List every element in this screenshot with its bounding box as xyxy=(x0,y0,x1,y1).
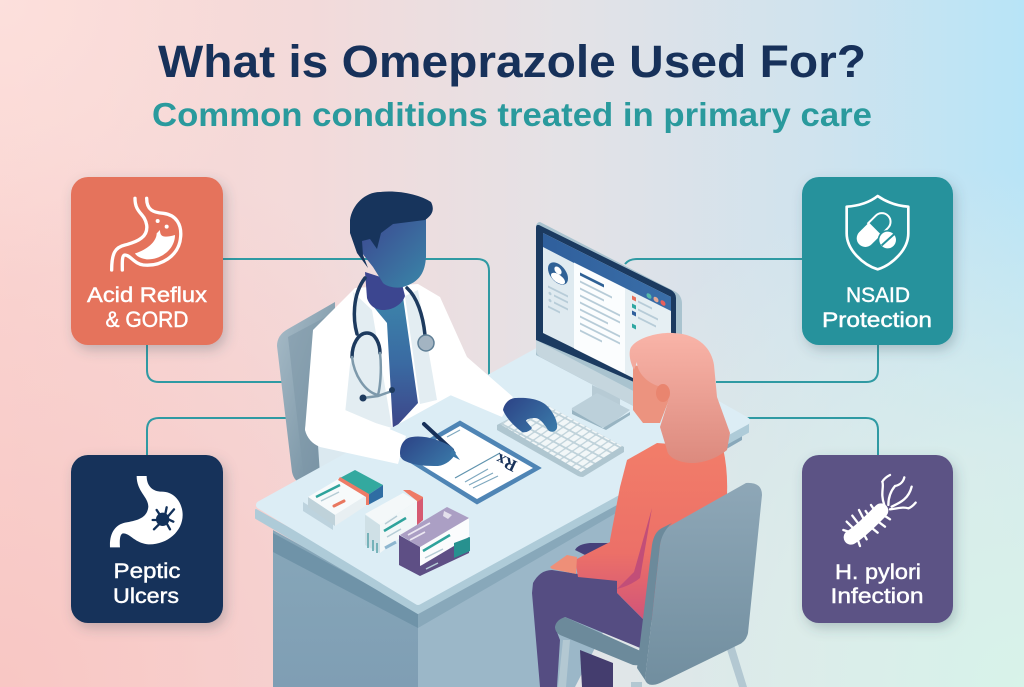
desk left panel xyxy=(273,530,418,687)
box 1 xyxy=(303,470,383,530)
card: H. pylori infection xyxy=(802,455,953,623)
icon: stomach with ulcer xyxy=(110,476,183,547)
pen xyxy=(424,424,452,450)
seat xyxy=(555,617,645,665)
subtitle: Common conditions treated in primary care xyxy=(152,96,872,133)
desk xyxy=(256,328,748,687)
head xyxy=(360,218,426,288)
box 2 xyxy=(365,490,423,553)
hair xyxy=(350,192,433,268)
sleeve fold xyxy=(617,508,652,589)
monitor stand xyxy=(592,385,620,412)
torso xyxy=(610,443,727,623)
patient xyxy=(532,333,762,687)
far leg xyxy=(580,650,613,687)
Rx mark: Rx xyxy=(492,449,520,476)
monitor rim xyxy=(536,222,682,420)
chair back xyxy=(645,483,762,685)
connector lines xyxy=(147,259,878,455)
computer monitor xyxy=(536,222,682,430)
left sleeve xyxy=(305,390,406,464)
desk right panel xyxy=(418,500,640,687)
knee shadow xyxy=(575,543,610,555)
coat shadow under sleeve xyxy=(318,428,405,475)
card: H. pylori infection: Infection xyxy=(830,585,924,608)
medicine boxes xyxy=(303,470,470,576)
desk edge xyxy=(256,422,748,613)
writing hand xyxy=(400,437,456,466)
card: H. pylori infection: H. pylori xyxy=(835,561,921,584)
trousers xyxy=(532,570,647,687)
card: peptic ulcers: Peptic xyxy=(114,560,180,583)
doctor chair xyxy=(277,302,335,483)
card: peptic ulcers xyxy=(71,455,223,623)
screen header xyxy=(543,233,671,313)
card: NSAID protection: NSAID xyxy=(846,284,910,307)
sleeve xyxy=(575,490,652,582)
card: peptic ulcers: Ulcers xyxy=(113,585,179,608)
card: NSAID protection xyxy=(802,177,953,345)
face xyxy=(633,365,670,423)
icon: shield with pills xyxy=(847,196,908,269)
icon: stomach with acid xyxy=(112,198,181,270)
shirt xyxy=(368,297,418,430)
neck xyxy=(365,272,405,310)
screen content xyxy=(548,243,671,397)
ear xyxy=(656,384,670,402)
card: acid reflux and GORD: & GORD xyxy=(106,307,188,332)
doctor arms and hands xyxy=(305,345,557,466)
right sleeve xyxy=(443,345,513,417)
hand xyxy=(550,555,577,574)
typing hand xyxy=(503,398,557,432)
doctor xyxy=(305,192,480,480)
chair legs xyxy=(558,635,747,687)
keyboard xyxy=(497,402,624,477)
box 3 xyxy=(399,507,470,576)
coat torso xyxy=(305,284,480,480)
coat lapel shading xyxy=(345,290,437,428)
monitor bezel xyxy=(536,225,676,400)
icon: bacterium xyxy=(843,475,916,546)
hair xyxy=(630,333,730,463)
card: acid reflux and GORD: Acid Reflux xyxy=(87,284,208,307)
screen body xyxy=(543,233,671,396)
desk top xyxy=(260,328,746,601)
title: What is Omeprazole Used For? xyxy=(158,36,866,87)
clipboard with prescription xyxy=(400,421,541,504)
stethoscope xyxy=(352,278,434,402)
card: acid reflux and GORD xyxy=(71,177,223,345)
card: NSAID protection: Protection xyxy=(822,309,932,332)
